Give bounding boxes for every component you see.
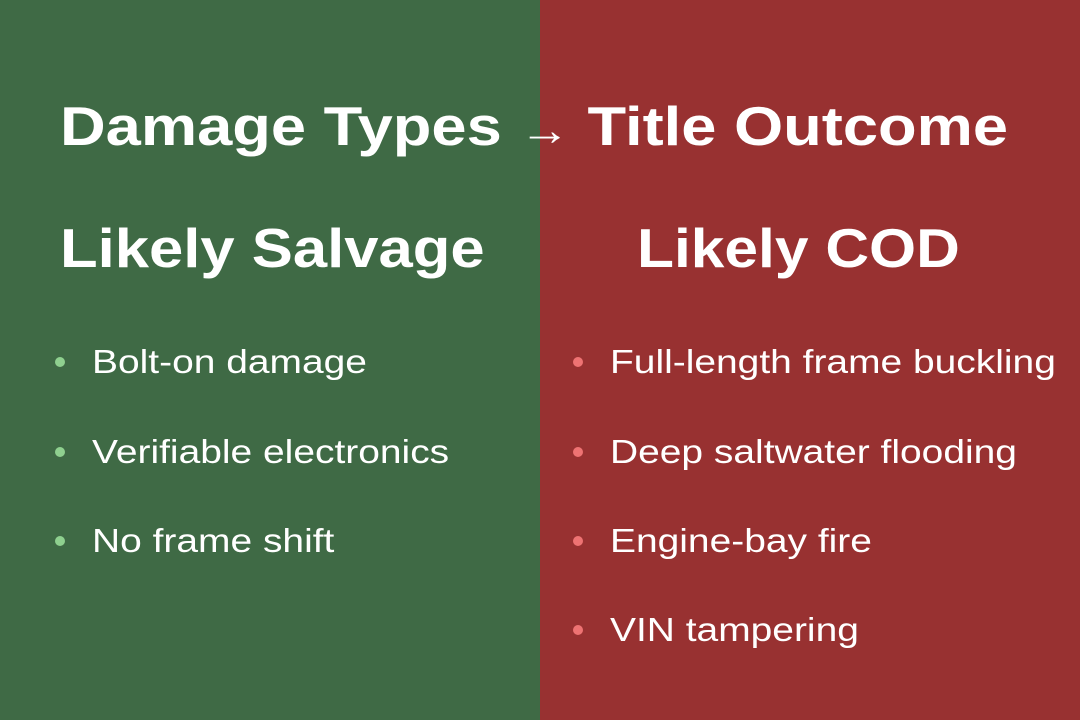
list: salvage items xyxy=(55,343,449,559)
panel: likely COD background xyxy=(540,0,1080,720)
list: COD items: Engine-bay fire xyxy=(610,522,872,559)
list: salvage items: Bolt-on damage xyxy=(92,343,367,380)
panel: likely salvage background xyxy=(0,0,540,720)
heading: likely salvage: Likely Salvage xyxy=(60,217,485,279)
list: COD items xyxy=(573,343,1056,648)
list: COD items: Deep saltwater flooding xyxy=(610,433,1017,470)
list: salvage items: Verifiable electronics xyxy=(92,433,449,470)
list: salvage items: No frame shift xyxy=(92,522,334,559)
title: Damage Types → Title Outcome xyxy=(60,95,1008,157)
list: COD items: Full-length frame buckling xyxy=(610,343,1056,380)
list: COD items: VIN tampering xyxy=(610,611,859,648)
heading: likely COD: Likely COD xyxy=(637,217,960,279)
